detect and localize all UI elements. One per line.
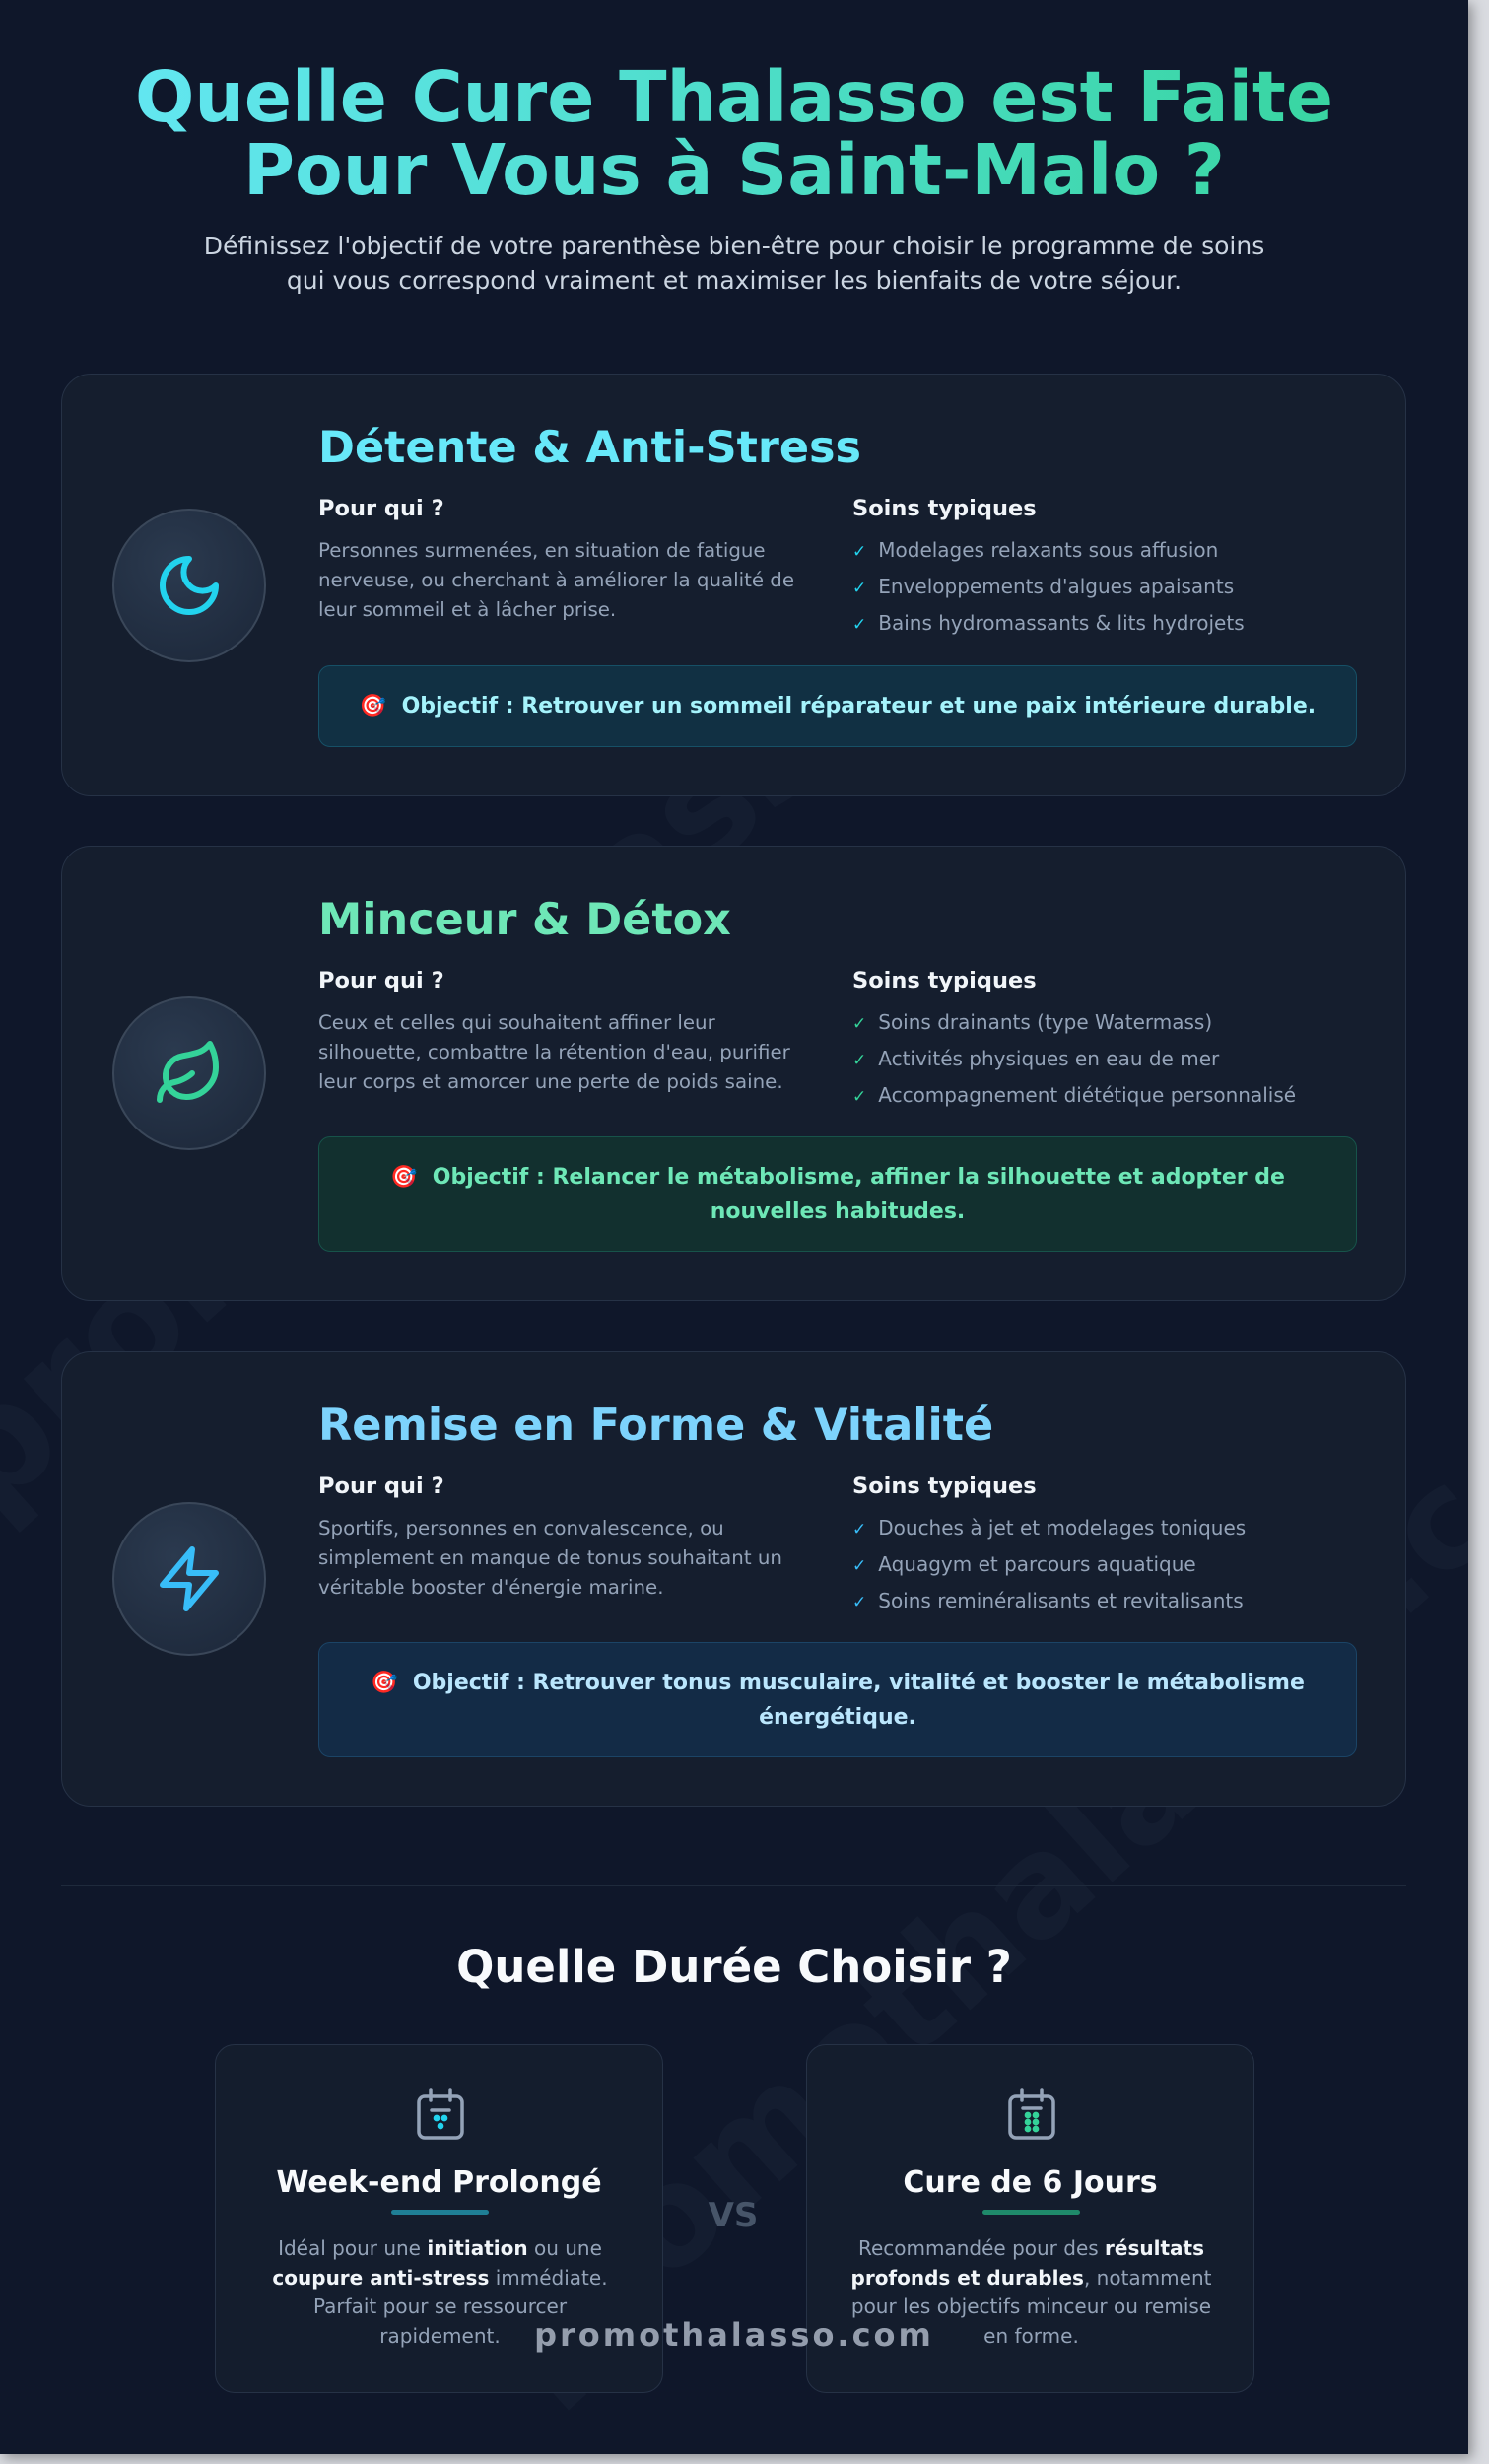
label: pour qui: Pour qui ? <box>318 496 444 521</box>
panel: détente <box>61 374 1406 796</box>
subtitle <box>204 232 1264 295</box>
label: soins: Soins typiques <box>852 968 1037 993</box>
list: soins: ✓ Soins reminéralisants et revitalisants <box>852 1589 1244 1612</box>
text: pour qui: Sportifs, personnes en convalescence, ou simplement en manque de tonus souhaitant un véritable booster d'énergie marine. <box>318 1517 782 1599</box>
callout: objectif: 🎯 Objectif : Retrouver un sommeil réparateur et une paix intérieure durable. <box>360 694 1316 719</box>
title <box>0 61 1468 207</box>
text: Parfait pour se ressourcer <box>313 2294 567 2318</box>
icon: leaf <box>112 996 266 1150</box>
subtitle: Définissez l'objectif de votre parenthèse bien-être pour choisir le programme de soins <box>204 232 1264 260</box>
callout: objectif: 🎯 Objectif : Retrouver tonus musculaire, vitalité et booster le métabolisme énergétique. <box>371 1670 1305 1729</box>
list: soins: ✓ Aquagym et parcours aquatique <box>852 1552 1196 1576</box>
callout: objectif: 🎯 Objectif : Relancer le métabolisme, affiner la silhouette et adopter de nouvelles habitudes. <box>390 1165 1285 1224</box>
list: soins: ✓ Activités physiques en eau de mer <box>852 1047 1219 1070</box>
icon: calendar <box>1008 2088 1055 2140</box>
heading: durée: Quelle Durée Choisir ? <box>456 1941 1012 1993</box>
text: profonds et durables, notamment <box>851 2265 1211 2289</box>
callout: objectif <box>318 1136 1357 1252</box>
label: soins: Soins typiques <box>852 496 1037 521</box>
list: soins <box>852 1010 1296 1107</box>
text: Idéal pour une initiation ou une <box>278 2236 602 2260</box>
list: soins: ✓ Modelages relaxants sous affusion <box>852 538 1218 562</box>
list: soins: ✓ Douches à jet et modelages toniques <box>852 1516 1246 1540</box>
watermark: footer: promothalasso.com <box>534 2316 934 2354</box>
text: Recommandée pour des résultats <box>858 2236 1204 2260</box>
label: vs: VS <box>709 2196 758 2235</box>
panel: cure 6 jours <box>806 2044 1254 2393</box>
list: soins <box>852 538 1245 635</box>
heading: Remise en Forme & Vitalité <box>318 1401 993 1451</box>
text: pour qui: Personnes surmenées, en situation de fatigue nerveuse, ou cherchant à améliorer la qualité de leur sommeil et à lâcher prise. <box>318 539 794 621</box>
label: soins: Soins typiques <box>852 1473 1037 1499</box>
callout: objectif <box>318 665 1357 747</box>
icon: calendar <box>417 2088 464 2140</box>
text: en forme. <box>983 2324 1079 2348</box>
list: soins <box>852 1516 1246 1612</box>
title: Cure de 6 Jours <box>903 2165 1158 2200</box>
title: Week-end Prolongé <box>276 2165 602 2200</box>
list: soins: ✓ Enveloppements d'algues apaisants <box>852 575 1234 598</box>
heading: Minceur & Détox <box>318 895 731 945</box>
label: pour qui: Pour qui ? <box>318 1473 444 1499</box>
heading: Détente & Anti-Stress <box>318 423 861 473</box>
text <box>851 2236 1211 2348</box>
text: rapidement. <box>379 2324 501 2348</box>
panel: remise en forme <box>61 1351 1406 1807</box>
text: pour qui: Ceux et celles qui souhaitent affiner leur silhouette, combattre la rétention d'eau, purifier leur corps et amorcer une perte de poids saine. <box>318 1011 790 1093</box>
title: Quelle Cure Thalasso est Faite <box>135 56 1333 138</box>
subtitle: qui vous correspond vraiment et maximiser les bienfaits de votre séjour. <box>287 266 1182 295</box>
text: coupure anti-stress immédiate. <box>272 2265 608 2289</box>
text: pour les objectifs minceur ou remise <box>851 2294 1211 2318</box>
title: Pour Vous à Saint-Malo ? <box>243 129 1225 211</box>
text <box>272 2236 608 2348</box>
list: soins: ✓ Accompagnement diététique personnalisé <box>852 1083 1296 1107</box>
icon: moon <box>112 509 266 662</box>
icon: lightning <box>112 1502 266 1656</box>
list: soins: ✓ Soins drainants (type Watermass) <box>852 1010 1212 1034</box>
panel: minceur <box>61 846 1406 1301</box>
callout: objectif <box>318 1642 1357 1757</box>
panel: week-end <box>215 2044 663 2393</box>
label: pour qui: Pour qui ? <box>318 968 444 993</box>
list: soins: ✓ Bains hydromassants & lits hydrojets <box>852 611 1245 635</box>
